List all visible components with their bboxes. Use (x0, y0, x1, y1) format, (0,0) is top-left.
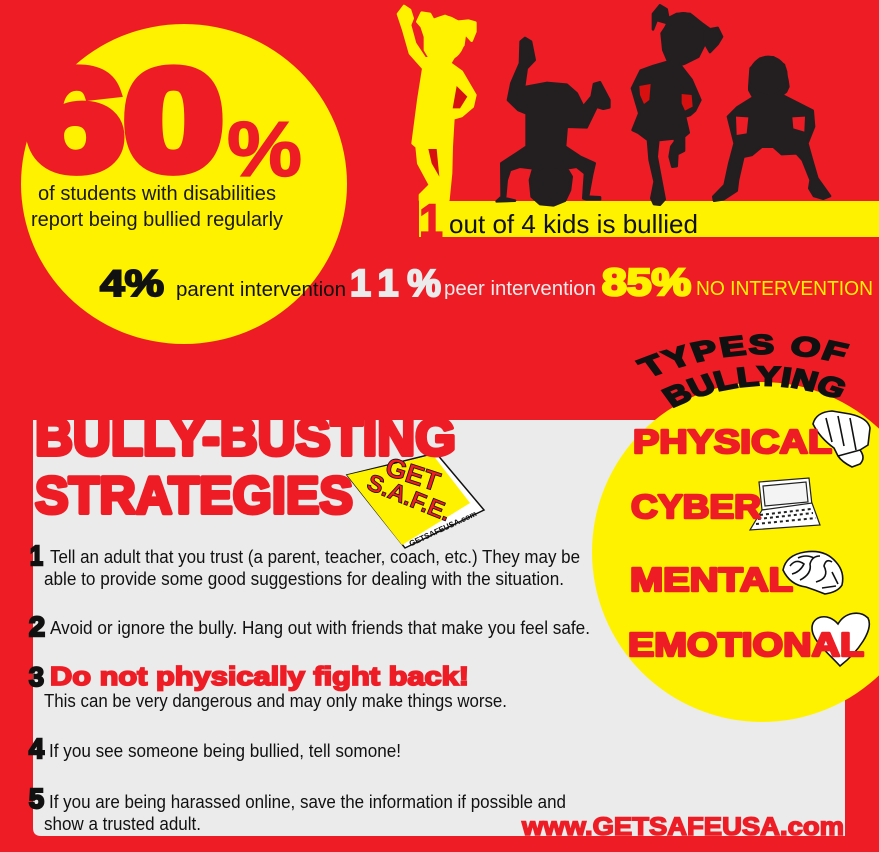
icon: heart (812, 613, 869, 666)
stat: peer intervention: peer intervention (444, 278, 596, 300)
stat: no intervention (602, 262, 873, 304)
bullying type labels (628, 423, 864, 663)
panel: yellow statistics circle (21, 24, 347, 344)
strategy 3: Do not physically fight back! (50, 661, 469, 691)
icon: fist (813, 411, 870, 467)
strategy 1: Tell an adult that you trust (a parent, teacher, coach, etc.) They may be (50, 547, 580, 567)
strategy 1: 1 (30, 540, 43, 571)
strategy 2: Avoid or ignore the bully. Hang out with friends that make you feel safe. (50, 618, 590, 638)
strategy 5 (29, 783, 566, 834)
strategy 1 (30, 540, 580, 589)
big stat: 60 percent (25, 41, 302, 200)
strategy 2 (29, 611, 590, 642)
stat description (31, 183, 283, 231)
icon: kid with pigtails (632, 5, 722, 205)
stat description: of students with disabilities (38, 183, 276, 205)
icon: crouching kid (713, 56, 830, 201)
stat: peer intervention (350, 263, 596, 305)
strategy 4: If you see someone being bullied, tell somone! (49, 741, 401, 761)
stat: parent intervention: parent intervention (176, 279, 346, 301)
icon: Get Safe logo (347, 452, 484, 548)
icon: kid silhouettes (398, 5, 830, 206)
yellow bar: 1 out of 4: 1 (419, 194, 443, 247)
icon: Get Safe logo: GETSAFEUSA.com (408, 509, 478, 548)
strategy 5: 5 (29, 783, 44, 814)
panel: types of bullying circle (592, 382, 879, 722)
heading: types of bullying (634, 334, 850, 408)
big stat: 60 percent: 60 (25, 41, 223, 200)
strategy 3 (29, 661, 507, 711)
stat: no intervention: NO INTERVENTION (696, 278, 873, 300)
yellow bar: 1 out of 4 (419, 194, 879, 247)
bullying type labels: PHYSICAL (633, 423, 832, 460)
strategy 5: show a trusted adult. (44, 814, 201, 834)
strategy 3: This can be very dangerous and may only make things worse. (44, 691, 507, 711)
icon: Get Safe logo: S.A.F.E. (363, 469, 455, 527)
heading: bully-busting strategies (35, 409, 456, 525)
stat: peer intervention: 11% (350, 263, 441, 305)
big stat: 60 percent: % (227, 105, 302, 193)
icon: brain (783, 551, 843, 594)
heading: bully-busting strategies: BULLY-BUSTING (35, 409, 456, 467)
heading: bully-busting strategies: STRATEGIES (35, 467, 353, 525)
strategy 3: 3 (29, 662, 44, 692)
panel: strategies background (33, 420, 845, 836)
stat description: report being bullied regularly (31, 209, 283, 231)
icon: yellow kid waving (398, 6, 475, 200)
strategy 2: 2 (29, 611, 45, 642)
bullying type labels: CYBER (631, 488, 761, 525)
stat: no intervention: 85% (602, 262, 691, 304)
stat: parent intervention (100, 263, 346, 304)
strategy 4: 4 (29, 733, 44, 764)
bullying type labels: EMOTIONAL (628, 626, 864, 663)
strategy 1: able to provide some good suggestions for dealing with the situation. (44, 569, 564, 589)
icon: kid doing handstand (497, 38, 609, 206)
heading: types of bullying: TYPES OF (634, 334, 850, 376)
bullying type labels: MENTAL (630, 561, 793, 598)
strategy 5: If you are being harassed online, save the information if possible and (49, 792, 566, 812)
yellow bar: 1 out of 4: out of 4 kids is bullied (449, 209, 698, 239)
stat: parent intervention: 4% (100, 263, 164, 304)
website url: www.GETSAFEUSA.com (521, 813, 844, 841)
icon: Get Safe logo: GET (382, 452, 444, 497)
strategy 4 (29, 733, 401, 764)
heading: types of bullying: BULLYING (660, 366, 846, 408)
icon: laptop (750, 478, 820, 530)
